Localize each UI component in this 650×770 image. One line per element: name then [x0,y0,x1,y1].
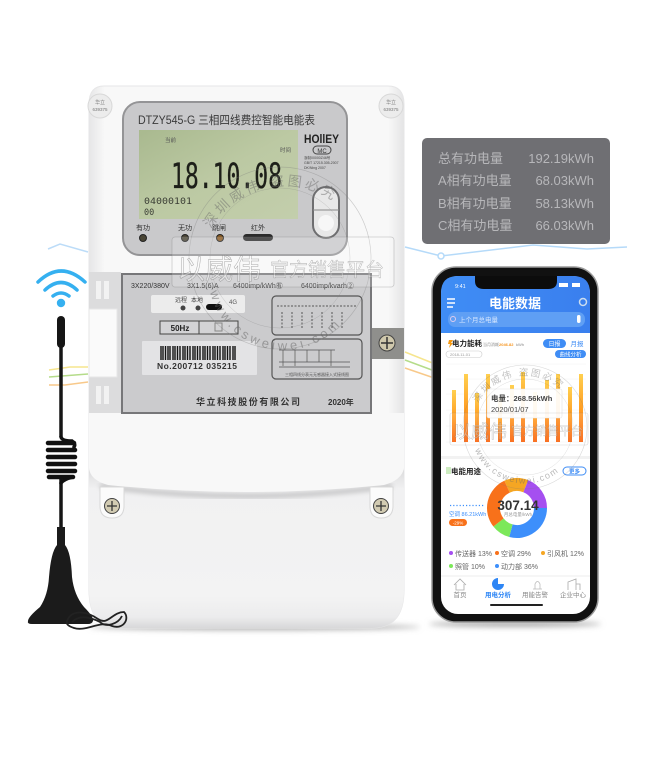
top left seal: 华立 [95,99,105,106]
nameplate panel: 3X1.5(6)A [187,283,219,290]
chart header [446,338,586,358]
brand logo: 浙制00000Z46号 [304,155,331,160]
watermark on meter: 以威伟 [177,254,261,285]
panel: energy readings: 192.19kWh [528,151,594,166]
watermark on meter: www.csweiwei.com [210,290,339,350]
wiring diagrams: 三相四线分表元无感器接入式接线图 [285,371,349,377]
chart tooltip: 电量：268.56kWh [491,393,553,403]
antenna magnetic base [28,527,93,624]
chart tooltip [487,389,562,418]
LCD screen: 04000101 [144,197,192,207]
donut chart: 月总电量/kWh [504,511,533,518]
chart header: 当月消耗 [483,341,499,347]
watermark on phone: 官方销售平台 [511,423,583,438]
meter body [89,86,404,628]
nameplate panel: 3X220/380V [131,283,170,290]
comm module tag: 本地 [191,296,203,304]
chart header: 2018-11-01 [450,352,471,357]
chart header: 2046.82 [499,342,514,347]
comm module tag: 4G [229,300,237,306]
donut callout [449,506,486,526]
brand logo: DK/Ning 2007 [304,166,326,170]
section separator [441,456,590,459]
frequency box [160,321,238,334]
donut legend [449,549,584,571]
panel: energy readings: 68.03kWh [535,173,594,188]
indicator labels and lamps [136,223,273,242]
brand logo: HOllEY [304,134,339,146]
tab bar: 用电分析 [485,590,512,599]
left terminal hinge [89,272,121,413]
smart meter [88,86,420,630]
right terminal screw [372,328,404,359]
chart header: kWh [516,342,524,347]
phone frame [432,267,598,622]
donut callout: 空调 86.21kWh [449,510,486,518]
barcode label: No.200712 035215 [157,361,237,371]
watermark on meter [172,166,394,350]
LCD screen: 00 [144,208,154,218]
indicator labels and lamps: 跳闸 [212,223,226,232]
upper cover [89,413,404,496]
donut legend: 空调 29% [501,549,531,558]
nameplate panel: 6400imp/kvarh② [301,282,354,290]
brand logo: GB/T 17215.305-2007 [304,161,339,165]
app header: 电能数据 [489,296,541,311]
lower left screw [100,487,124,518]
antenna rod [59,345,63,530]
wiring diagrams [272,296,362,379]
watermark on meter: 深圳威伟 盗图必究 [202,174,336,228]
chart tooltip: 2020/01/07 [491,405,529,414]
panel: energy readings [422,138,610,244]
app header: 上个月总电量 [459,315,498,324]
icon: wifi signal [38,271,85,307]
barcode label [142,341,257,375]
top right seal: 639375 [383,107,399,112]
tab bar: 用能告警 [522,590,548,599]
chart header: 月报 [570,339,584,348]
top right seal [379,94,403,118]
bar chart [446,364,586,442]
panel: energy readings: 66.03kWh [535,218,594,233]
smartphone [429,267,601,627]
donut chart: 307.14 [497,498,539,513]
phone screen [441,276,590,614]
antenna coil [48,437,75,483]
antenna cable [67,612,126,629]
LCD screen: 时间 [280,146,291,154]
display faceplate [123,102,347,255]
tab bar [441,576,590,606]
watermark on phone: www.csweiwei.com [476,448,558,484]
model title: DTZY545-G 三相四线费控智能电能表 [138,113,315,127]
tab bar: 首页 [454,590,467,599]
meter floor shadow [90,624,420,630]
app header [441,276,590,333]
donut legend: 引风机 12% [547,549,584,558]
phone shadow [429,621,601,627]
donut callout: -29% [453,520,463,526]
year: 2020年 [328,397,354,407]
donut chart [493,484,540,532]
panel: energy readings: C相有功电量 [438,218,512,233]
manufacturer: 华立科技股份有限公司 [196,396,300,407]
watermark on phone [450,364,588,490]
donut legend: 动力部 36% [501,562,538,571]
app header: 9:41 [455,284,466,290]
press button [313,187,339,238]
indicator labels and lamps: 红外 [251,223,265,232]
chart header: 日报 [548,340,561,348]
watermark on phone: 以威伟 [453,422,507,442]
lower right screw [370,487,393,518]
panel: energy readings: B相有功电量 [438,196,512,211]
donut legend: 传送器 13% [455,549,492,558]
panel: energy readings: 58.13kWh [535,196,594,211]
watermark on meter: 官方销售平台 [270,259,384,281]
donut legend: 照管 10% [455,562,485,571]
usage heading [446,466,586,476]
comm module tag [151,295,245,313]
indicator labels and lamps: 无功 [178,223,192,232]
indicator labels and lamps: 有功 [136,223,150,232]
LCD screen: 当前 [165,136,177,144]
watermark on phone: 深圳威伟 盗图必究 [472,368,564,402]
frequency box: 50Hz [171,324,189,333]
LCD screen [139,130,298,219]
usage heading: 更多 [569,468,580,476]
brand logo: MC [317,149,327,155]
chart header: 曲线分析 [559,350,582,358]
antenna tip [57,316,65,348]
panel: energy readings: 总有功电量 [438,151,503,166]
top left seal [88,94,112,118]
top left seal: 639375 [92,107,108,112]
brand logo [304,134,339,170]
data connection lines [48,244,627,385]
chart header: 电力能耗 [452,338,482,348]
nameplate panel: 6400imp/kWh㊒ [233,282,283,290]
top right seal: 华立 [386,99,396,106]
usage heading: 电能用途 [451,466,481,476]
tab bar: 企业中心 [560,590,586,599]
lower cover [89,470,404,628]
LCD screen: 18.10.08 [171,157,282,197]
panel: energy readings: A相有功电量 [438,173,512,188]
antenna [28,316,126,629]
comm module tag: 远程 [175,296,187,304]
nameplate panel [122,274,371,413]
